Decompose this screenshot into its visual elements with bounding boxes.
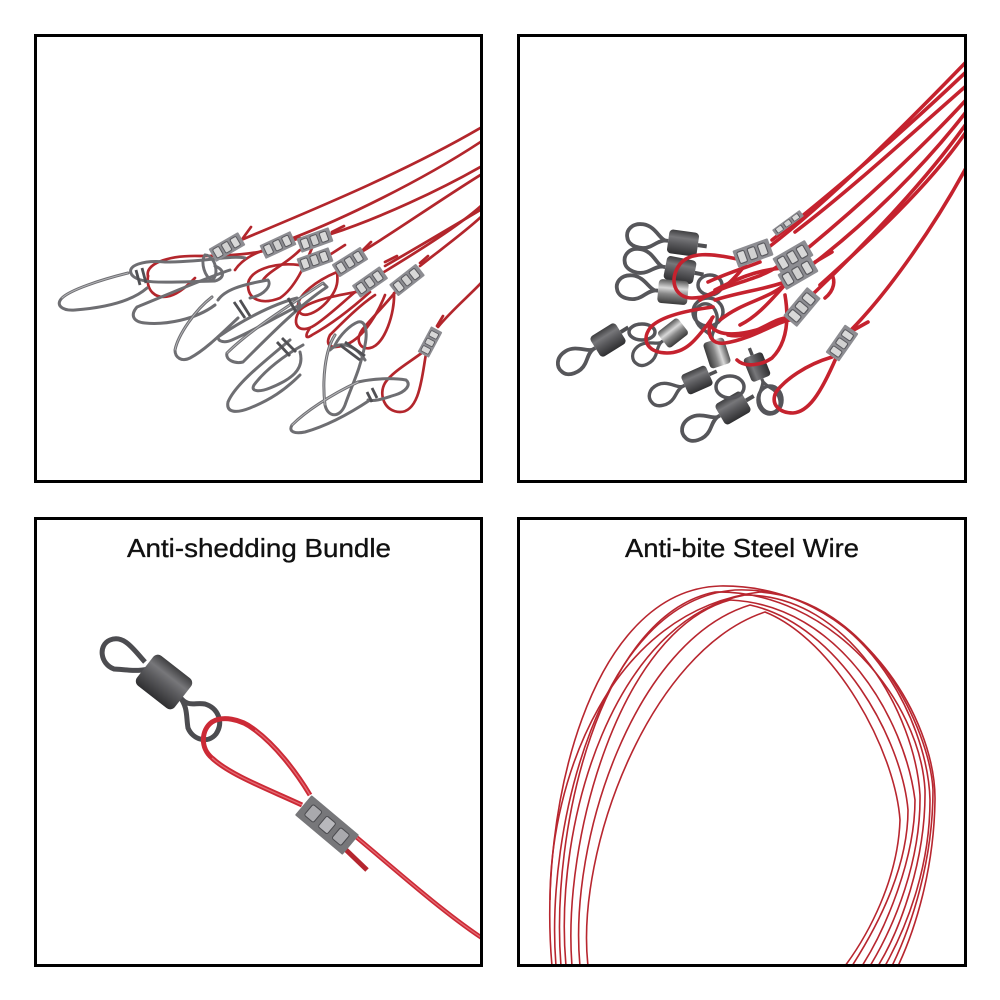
- panel: rolling swivel leaders: [518, 36, 966, 482]
- panel: anti-bite steel wire: [518, 518, 966, 966]
- heading: Anti-shedding Bundle: Anti-shedding Bundle: [127, 533, 391, 563]
- heading: Anti-bite Steel Wire: Anti-bite Steel Wire: [625, 533, 859, 563]
- coiled red wires: [550, 586, 935, 966]
- swivel close-up: [102, 639, 220, 740]
- crimp sleeve: [295, 795, 359, 855]
- red steel wires: [646, 62, 966, 413]
- snap clips: [59, 255, 408, 433]
- red wire loop and tail: [203, 719, 482, 938]
- wire highlight: [212, 730, 482, 938]
- coil details: [136, 268, 377, 402]
- red steel wires: [148, 127, 482, 412]
- crimp sleeves: [209, 227, 442, 358]
- panel: snap swivel leaders: [36, 36, 482, 482]
- swivel rings: [629, 275, 782, 414]
- crimp sleeves: [732, 210, 859, 362]
- panel: anti-shedding bundle: [36, 518, 482, 966]
- swivels: [553, 222, 784, 447]
- clip highlights: [62, 273, 358, 425]
